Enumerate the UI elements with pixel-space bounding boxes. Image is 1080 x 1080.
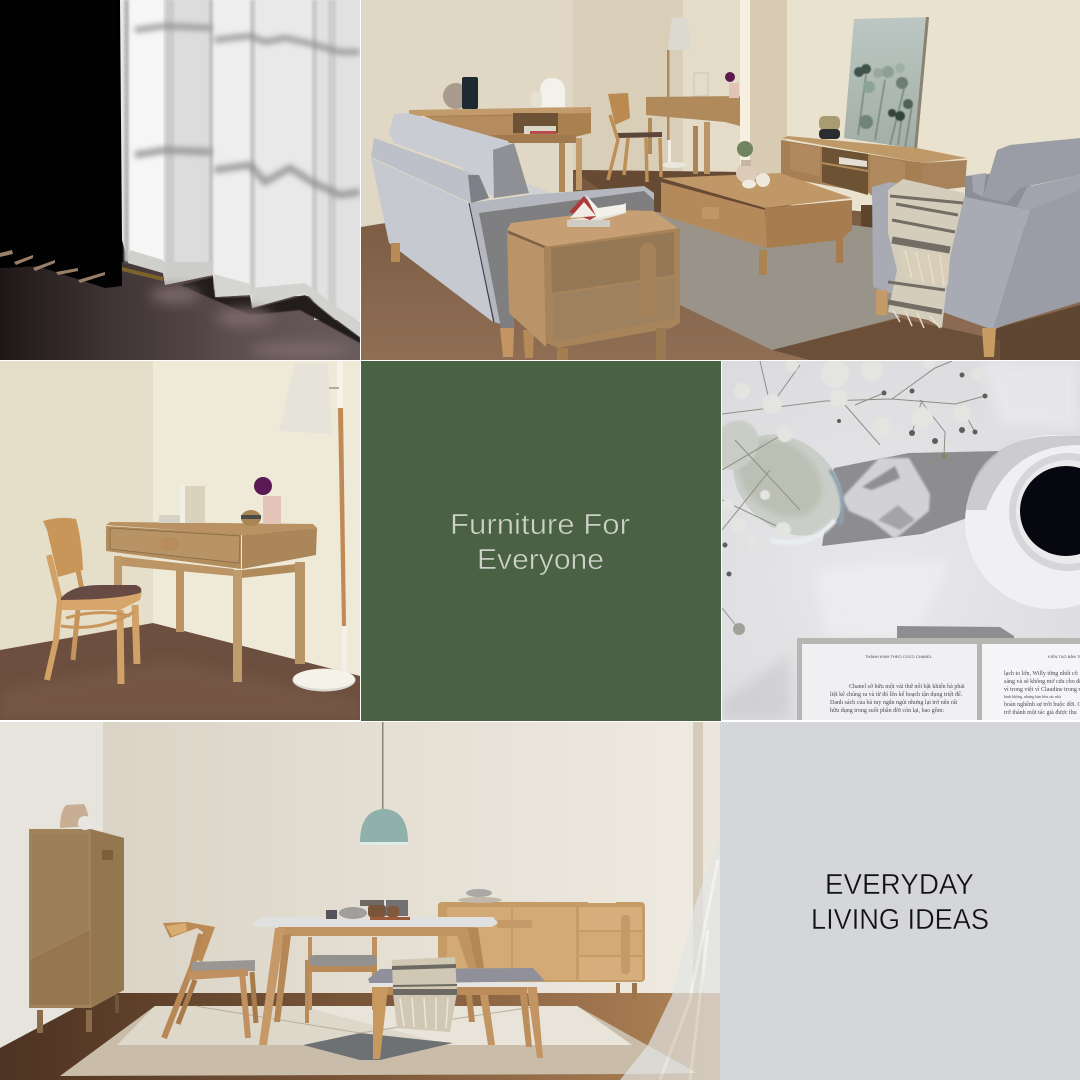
book: liệt kê chúng ra và từ đó lên kế hoạch tận dụng triệt để.: [830, 691, 963, 698]
artwork: [844, 17, 929, 149]
walls: [361, 0, 573, 227]
panel: grey text block: [720, 722, 1080, 1080]
tabletop items: [326, 900, 410, 920]
panel: green title block: [361, 361, 721, 721]
book: lạch to lớn, Willy từng nhốt cô: [1004, 670, 1078, 677]
back desk: [646, 72, 740, 174]
panel: dining room photo: [0, 722, 720, 1080]
sideboard vase: [819, 116, 840, 139]
book: kinh không, nhưng bản bên các nhà: [1004, 694, 1061, 700]
title: Furniture For Everyone: [450, 509, 630, 576]
sheer curtain: [620, 835, 720, 1080]
console table: [409, 77, 591, 192]
white curtain: [120, 0, 360, 337]
dining table: [253, 900, 498, 1045]
arm: [469, 186, 654, 328]
dark curtain: [43, 262, 122, 288]
coffee table: [661, 141, 852, 275]
heading: Everyday Living Ideas: [811, 869, 989, 936]
open book: [567, 194, 626, 227]
vase and ornaments: [736, 163, 758, 183]
book: trở thành một tác giả được thu: [1004, 710, 1077, 716]
sideboard: [438, 878, 645, 1000]
desk decor: [159, 477, 281, 526]
rug: [655, 212, 900, 350]
pendant lamp: [360, 722, 408, 845]
bench: [368, 968, 547, 1059]
throw on bench: [392, 957, 457, 1032]
hem: [128, 250, 165, 285]
right sofa: [872, 138, 1080, 357]
book: Danh sách của bà tuy ngắn ngủi nhưng lại trở nên rất: [830, 699, 958, 706]
legs: [391, 243, 400, 262]
panel: living room photo: [361, 0, 1080, 360]
left chair: [163, 922, 256, 1038]
panel: curtain photo: [0, 0, 360, 360]
nightstand: [507, 210, 680, 360]
glass vase: [702, 411, 862, 557]
book: [797, 626, 1080, 720]
carpet floor: [0, 262, 360, 360]
book: THÀNH KINH THEO COCO CHANEL: [865, 654, 933, 659]
heading: Everyday Living Ideas: LIVING IDEAS: [811, 904, 989, 936]
shadow under sheer curtain: [180, 277, 360, 343]
title: Furniture For Everyone: Everyone: [477, 544, 604, 576]
book: Chanel sở hữu một vài thứ nổi bật khiến bà phải: [849, 683, 965, 690]
light slats: [0, 250, 105, 283]
panel: flat lay photo: [702, 359, 1080, 721]
throw blanket: [888, 179, 965, 328]
panel: desk photo: [0, 361, 360, 720]
floor lamp: [662, 17, 686, 168]
back frame: [371, 138, 489, 203]
book: hữu dụng trong suốt phần đời còn lại, bao gồm:: [830, 707, 944, 714]
saucer and cup: [965, 435, 1080, 609]
back face: [371, 158, 493, 322]
chair behind table: [305, 937, 377, 1023]
floor: [0, 993, 720, 1080]
rug: [60, 1006, 697, 1076]
back chair: [608, 93, 662, 182]
desk: [106, 522, 317, 682]
baby's breath branches: [722, 359, 988, 635]
title: Furniture For Everyone: Furniture For: [450, 509, 630, 541]
sideboard: [781, 136, 967, 196]
wooden chair: [43, 518, 142, 684]
cast shadow: [822, 451, 999, 546]
brass threshold: [122, 267, 163, 281]
tall cabinet: [29, 804, 124, 1033]
sunlit carpet patches: [151, 287, 350, 358]
cushions: [389, 113, 510, 198]
floor: [361, 170, 1080, 360]
floor: [0, 623, 360, 720]
lamp: [279, 361, 356, 692]
left sofa: [371, 113, 654, 358]
heading: Everyday Living Ideas: EVERYDAY: [825, 869, 974, 901]
